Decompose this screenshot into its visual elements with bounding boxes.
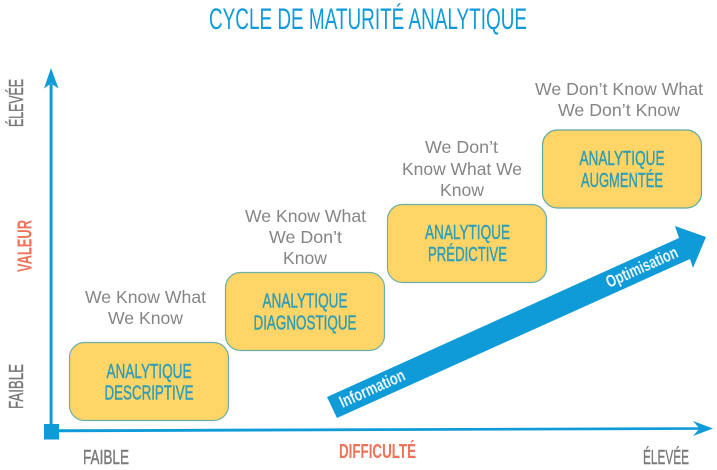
diagonal arrow: information to optimisation bbox=[327, 226, 706, 418]
caption: we don't know what we don't know: We Don’t Know bbox=[558, 100, 680, 120]
horizontal axis title: difficulté: DIFFICULTÉ bbox=[339, 440, 416, 463]
vertical axis label: élevée: ÉLEVÉE bbox=[5, 79, 28, 127]
caption: we don't know what we don't know bbox=[535, 79, 703, 120]
box label: descriptive bbox=[104, 361, 194, 404]
box label: diagnostique bbox=[254, 290, 356, 334]
box: descriptive bbox=[70, 342, 228, 420]
box label: prédictive: ANALYTIQUE bbox=[425, 222, 510, 244]
caption: we know what we don't know: We Know What bbox=[245, 206, 366, 226]
caption: we don't know what we don't know: We Don’t Know What bbox=[535, 79, 703, 99]
box label: augmentée: AUGMENTÉE bbox=[581, 169, 663, 192]
caption: we know what we know bbox=[85, 287, 206, 328]
caption: we know what we know: We Know bbox=[108, 308, 183, 328]
title: CYCLE DE MATURITÉ ANALYTIQUE bbox=[209, 3, 527, 36]
caption: we know what we don't know: Know bbox=[283, 248, 327, 268]
step 4: analytique augmentée bbox=[535, 79, 703, 208]
arrow label: information: Information bbox=[336, 366, 408, 412]
box: augmentée bbox=[542, 130, 702, 208]
box label: diagnostique: DIAGNOSTIQUE bbox=[254, 312, 356, 334]
axis origin square bbox=[44, 424, 59, 440]
box label: prédictive bbox=[425, 222, 510, 266]
caption: we know what we don't know bbox=[245, 206, 366, 268]
caption: we don't know what we know: We Don’t bbox=[425, 137, 498, 157]
box label: augmentée bbox=[580, 148, 664, 192]
caption: we know what we know: We Know What bbox=[85, 287, 206, 307]
caption: we don't know what we know: Know bbox=[440, 180, 484, 200]
step 1: analytique descriptive bbox=[70, 287, 228, 420]
box label: diagnostique: ANALYTIQUE bbox=[262, 290, 348, 312]
box label: augmentée: ANALYTIQUE bbox=[580, 148, 664, 170]
caption: we don't know what we know: Know What We bbox=[402, 159, 522, 179]
vertical axis arrow bbox=[44, 68, 58, 430]
arrow label: optimisation: Optimisation bbox=[603, 243, 681, 292]
box label: descriptive: ANALYTIQUE bbox=[106, 361, 192, 383]
caption: we know what we don't know: We Don’t bbox=[269, 227, 342, 247]
caption: we don't know what we know bbox=[402, 137, 522, 200]
box label: prédictive: PRÉDICTIVE bbox=[428, 243, 507, 266]
vertical axis label: faible: FAIBLE bbox=[6, 364, 28, 409]
box: prédictive bbox=[388, 204, 546, 282]
step 3: analytique prédictive bbox=[388, 137, 546, 282]
vertical axis title: valeur: VALEUR bbox=[14, 220, 36, 272]
horizontal axis label: faible: FAIBLE bbox=[83, 447, 129, 469]
step 2: analytique diagnostique bbox=[226, 206, 384, 350]
box label: descriptive: DESCRIPTIVE bbox=[104, 382, 194, 404]
box: diagnostique bbox=[226, 272, 384, 350]
horizontal axis arrow bbox=[58, 421, 713, 436]
